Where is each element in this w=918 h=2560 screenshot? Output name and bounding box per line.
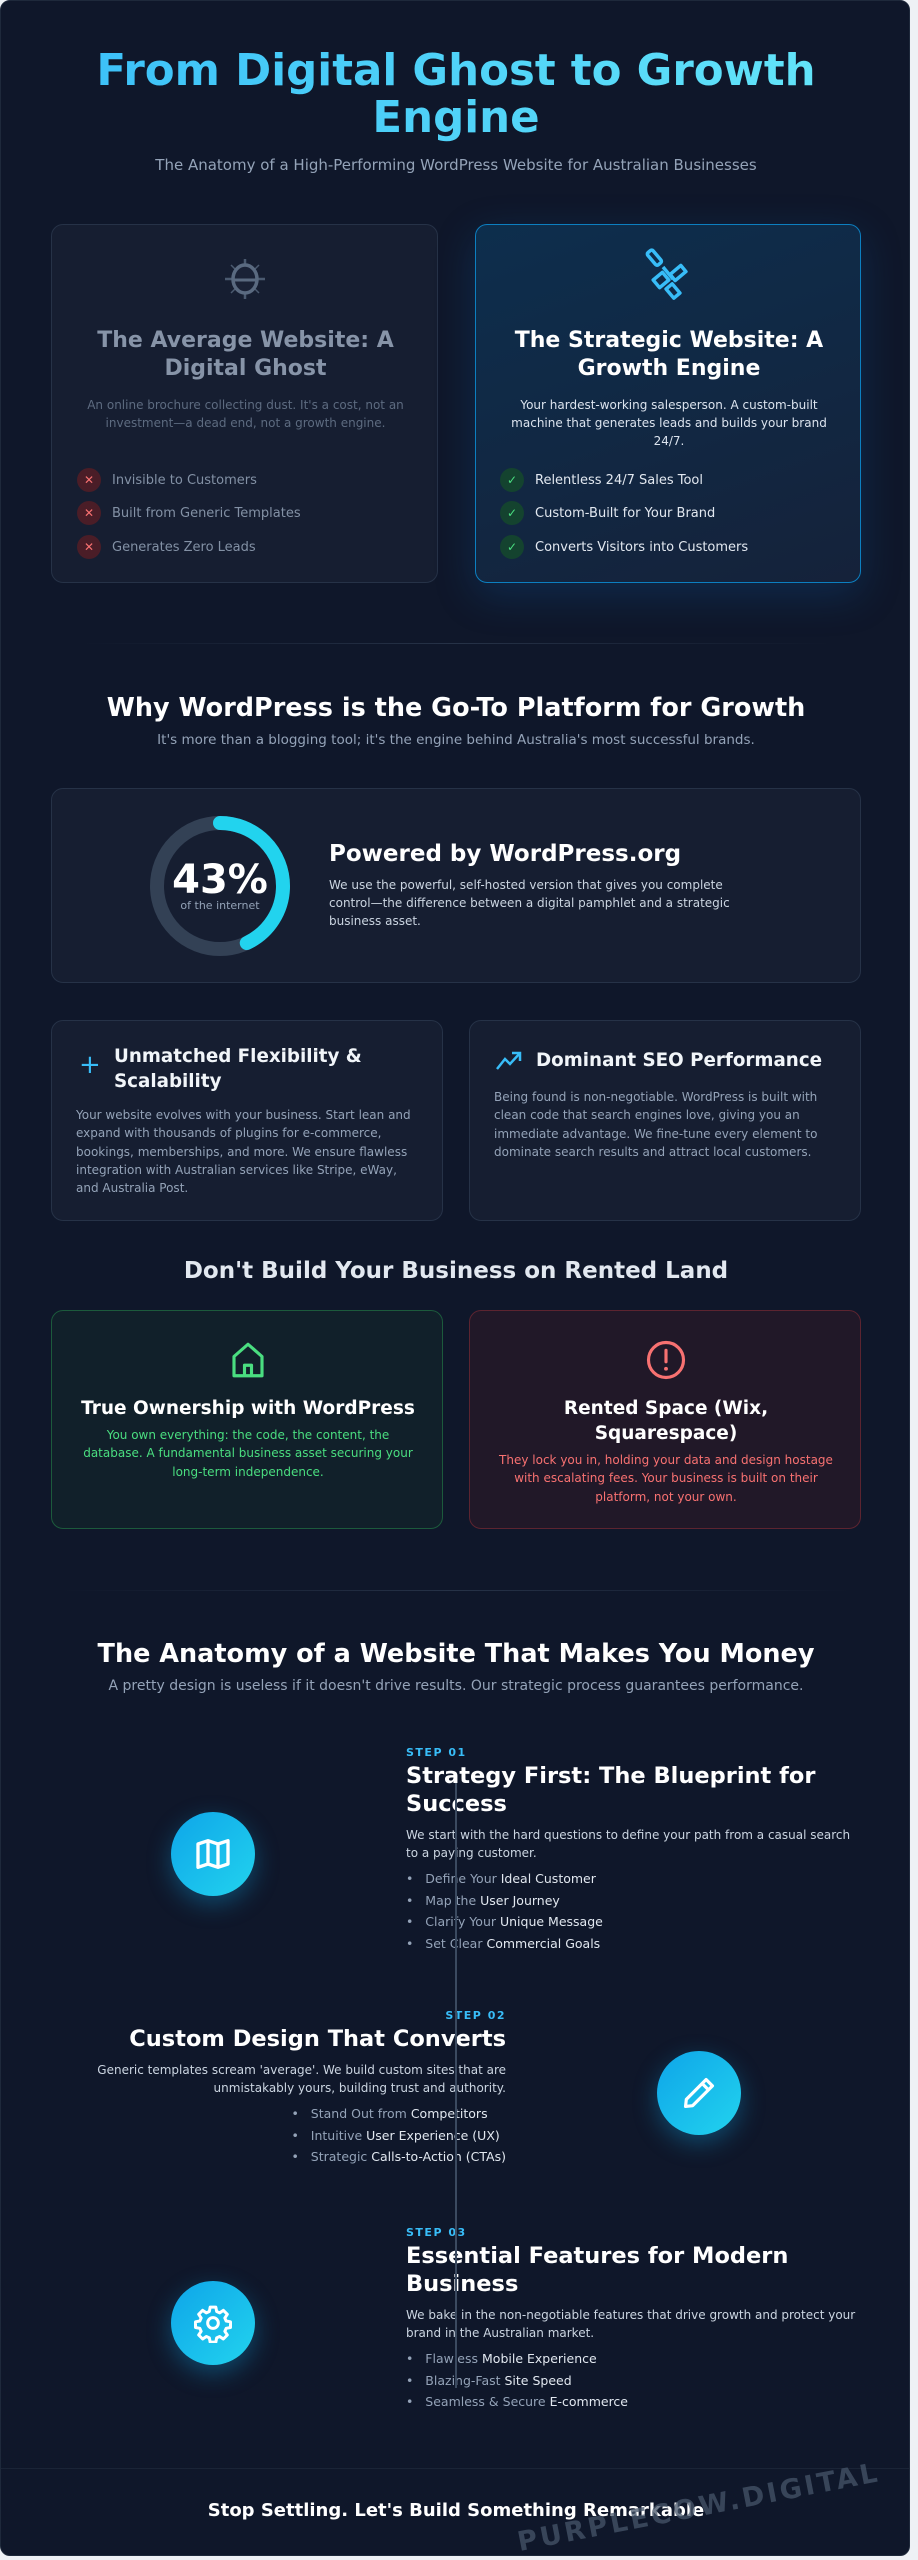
list: negatives: ✕ <box>84 506 94 520</box>
list: positives: ✓ <box>507 540 517 554</box>
list: positives: ✓ <box>507 473 517 487</box>
feature body: Your website evolves with your business. Start lean and expand with thousands of plugins for e-commerce, bookings, memberships, and more. We ensure flawless integration with Australian services like Stripe, eWay, and Australia Post. <box>76 1108 411 1195</box>
step text: • Clarify Your Unique Message <box>406 1914 603 1929</box>
icon: gear <box>171 2281 255 2365</box>
title: From Digital Ghost to Growth <box>96 46 816 96</box>
donut chart 43%: 43% <box>172 857 268 903</box>
icon: satellite <box>646 248 688 300</box>
panel: flexibility <box>51 1020 443 1221</box>
subheading: It's more than a blogging tool; it's the engine behind Australia's most successful brands. <box>157 732 755 748</box>
step text: Success <box>406 1791 507 1817</box>
step text: We start with the hard questions to define your path from a casual search to a paying customer. <box>406 1828 850 1860</box>
step text: STEP 03 <box>406 2226 467 2239</box>
icon: ghost <box>225 259 265 299</box>
list: negatives: ✕ <box>84 540 94 554</box>
step 03 <box>160 2226 856 2409</box>
step text: Custom Design That Converts <box>129 2026 506 2052</box>
panel: rented space <box>469 1310 861 1529</box>
step text: Business <box>406 2271 518 2297</box>
watermark: PURPLECOW.DIGITAL <box>515 2457 883 2556</box>
panel: true ownership <box>51 1310 443 1529</box>
step text: • Intuitive User Experience (UX) <box>292 2128 500 2142</box>
stat text: Powered by WordPress.org <box>329 841 681 867</box>
step text: • Seamless & Secure E-commerce <box>406 2394 628 2409</box>
icon: trend arrow <box>496 1052 522 1070</box>
step text: Strategy First: The Blueprint for <box>406 1763 815 1789</box>
step text: • Flawless Mobile Experience <box>406 2351 597 2366</box>
title: Engine <box>372 93 540 143</box>
step text: Generic templates scream 'average'. We build custom sites that are unmistakably yours, building trust and authority. <box>97 2063 506 2095</box>
heading: anatomy: The Anatomy of a Website That Makes You Money <box>98 1639 814 1669</box>
feature title: Dominant SEO Performance <box>536 1050 822 1071</box>
list: negatives: Generates Zero Leads <box>112 540 256 554</box>
icon: house <box>232 1342 264 1378</box>
list: negatives: Invisible to Customers <box>112 472 257 488</box>
step text <box>406 2226 856 2409</box>
heading: The Strategic Website: A <box>515 328 823 353</box>
panel: SEO <box>469 1020 861 1221</box>
title <box>1 48 911 142</box>
donut chart 43% <box>150 816 290 956</box>
step text: • Set Clear Commercial Goals <box>406 1936 600 1950</box>
step text <box>406 1746 850 1950</box>
list: positives: Relentless 24/7 Sales Tool <box>535 472 703 488</box>
list: positives: Custom-Built for Your Brand <box>535 506 715 520</box>
list: positives: ✓ <box>507 506 517 520</box>
feature title: Scalability <box>114 1071 221 1092</box>
subheading: A pretty design is useless if it doesn't drive results. Our strategic process guarantees performance. <box>109 1678 803 1694</box>
list: negatives: Built from Generic Templates <box>112 506 301 520</box>
step 02 <box>97 2009 752 2164</box>
panel: stat card <box>51 788 861 983</box>
footer call to action: Stop Settling. Let's Build Something Remarkable <box>208 2500 704 2521</box>
list: negatives: ✕ <box>84 473 94 487</box>
heading: why wordpress: Why WordPress is the Go-To Platform for Growth <box>107 693 805 723</box>
step text: STEP 02 <box>445 2009 506 2022</box>
heading <box>514 328 823 381</box>
title: Squarespace) <box>595 1423 737 1444</box>
step text: STEP 01 <box>406 1746 467 1759</box>
title <box>564 1398 768 1444</box>
step text <box>97 2009 506 2164</box>
icon: map <box>171 1812 255 1896</box>
icon: pencil <box>657 2051 741 2135</box>
icon: plus: + <box>79 1050 101 1080</box>
step text: Essential Features for Modern <box>406 2243 788 2269</box>
panel: strategic website <box>475 224 861 583</box>
list: positives <box>500 468 748 559</box>
donut chart 43%: of the internet <box>180 899 260 912</box>
step text: • Stand Out from Competitors <box>292 2106 488 2121</box>
subtitle: The Anatomy of a High-Performing WordPress Website for Australian Businesses <box>155 156 757 174</box>
description: An online brochure collecting dust. It's a cost, not an investment—a dead end, not a growth engine. <box>87 398 404 430</box>
icon: warning <box>646 1340 686 1380</box>
heading <box>97 328 394 381</box>
step 01 <box>160 1746 850 1950</box>
heading: rented land: Don't Build Your Business on Rented Land <box>184 1258 728 1284</box>
feature title <box>114 1046 362 1092</box>
stat text: We use the powerful, self-hosted version that gives you complete control—the difference between a digital pamphlet and a strategic business asset. <box>329 878 730 928</box>
title: Rented Space (Wix, <box>564 1398 768 1419</box>
step text: • Blazing-Fast Site Speed <box>406 2372 572 2388</box>
feature title: Unmatched Flexibility & <box>114 1046 362 1067</box>
list: positives: Converts Visitors into Customers <box>535 540 748 554</box>
step text: We bake in the non-negotiable features that drive growth and protect your brand in the Australian market. <box>406 2308 855 2340</box>
feature body: Being found is non-negotiable. WordPress is built with clean code that search engines love, giving you an immediate advantage. We fine-tune every element to dominate search results and attract local customers. <box>494 1090 817 1159</box>
heading: The Average Website: A <box>97 328 394 353</box>
title: True Ownership with WordPress <box>81 1398 415 1419</box>
step text: • Strategic Calls-to-Action (CTAs) <box>292 2149 506 2164</box>
step text: • Map the User Journey <box>406 1892 560 1908</box>
step text: • Define Your Ideal Customer <box>406 1871 596 1886</box>
description: You own everything: the code, the content, the database. A fundamental business asset securing your long-term independence. <box>83 1428 413 1479</box>
stat text <box>329 841 730 928</box>
panel: average website <box>51 224 438 583</box>
heading: Growth Engine <box>578 356 760 381</box>
description: Your hardest-working salesperson. A custom-built machine that generates leads and builds your brand 24/7. <box>511 398 827 448</box>
heading: Digital Ghost <box>164 356 327 381</box>
description: They lock you in, holding your data and design hostage with escalating fees. Your business is built on their platform, not your own. <box>499 1453 833 1504</box>
list: negatives <box>77 468 301 559</box>
